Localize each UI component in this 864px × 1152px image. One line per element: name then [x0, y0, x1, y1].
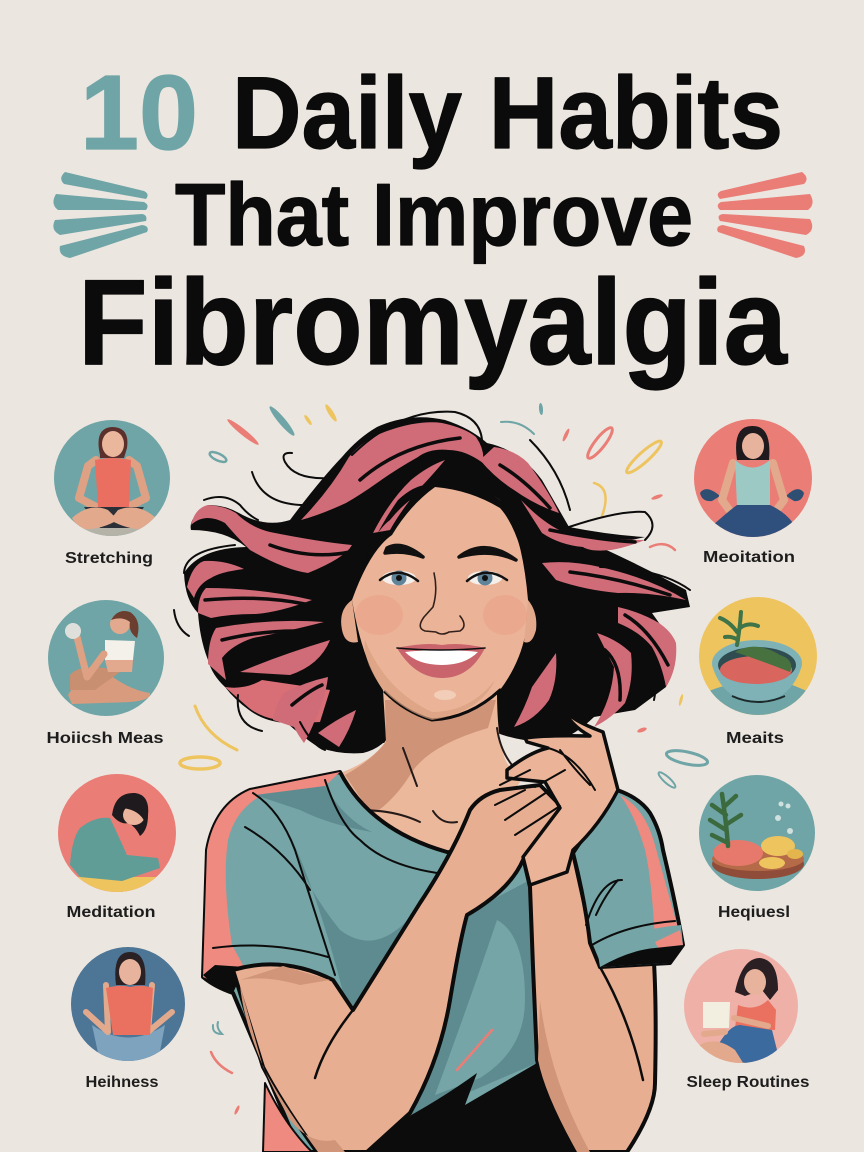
title: Daily Habits [232, 56, 783, 170]
finger lines [495, 748, 595, 835]
coral slash [457, 1030, 492, 1070]
eyebrows [385, 545, 516, 560]
icon: wellness [71, 947, 185, 1062]
icon: meditation left [58, 774, 178, 897]
shirt body [203, 772, 575, 1152]
face shade [365, 640, 495, 720]
confetti accents [180, 403, 709, 1115]
black cuff left [203, 965, 245, 993]
ears [341, 600, 536, 642]
label: Heqiuesl [718, 904, 790, 921]
nose [420, 573, 464, 634]
left arm [233, 785, 562, 1152]
icon: sleep routines [684, 949, 798, 1066]
hair back pink lower left [225, 680, 330, 722]
hair wisps [174, 412, 690, 750]
title [78, 54, 788, 390]
icon: coral rays right [717, 172, 813, 258]
sleeve left coral edge [203, 772, 340, 990]
label: Meaits [726, 730, 784, 747]
label: Meditation [66, 904, 156, 921]
label: Sleep Routines [686, 1074, 810, 1091]
shirt shading [255, 786, 537, 1125]
coral hem sliver [263, 1083, 312, 1152]
hair silhouette [184, 417, 690, 753]
right arm [523, 853, 656, 1152]
right arm crease [600, 967, 643, 1080]
title: Fibromyalgia [78, 254, 788, 390]
neck [340, 690, 520, 852]
cheeks [355, 595, 403, 635]
icon: stretching [54, 420, 170, 546]
right sleeve stripe [620, 795, 680, 943]
label: Stretching [65, 550, 153, 567]
hair pink strands [187, 422, 686, 747]
left arm crease [315, 1010, 353, 1078]
label: Heihness [86, 1074, 158, 1091]
icon: plate food [699, 775, 815, 891]
eyes [382, 571, 416, 585]
shirt lines [213, 780, 437, 975]
icon: bowl meal [699, 597, 817, 720]
panel: left habits [46, 420, 185, 1091]
right hand [507, 708, 618, 885]
icon: teal rays left [53, 172, 148, 258]
mouth [397, 644, 485, 678]
highlight [434, 690, 456, 700]
title: 10 [80, 54, 198, 172]
face [352, 487, 528, 720]
label: Meoitation [703, 549, 795, 566]
torso highlight [435, 920, 525, 1095]
right arm shade [538, 1000, 590, 1152]
icon: holistic meals [48, 600, 164, 716]
black shirt hem [367, 1063, 575, 1152]
hair black streaks [205, 438, 670, 705]
left arm shade [240, 985, 345, 1152]
fringe [356, 484, 530, 590]
jaw line [385, 690, 500, 720]
panel: right habits [684, 419, 817, 1091]
icon: meditation right [694, 419, 812, 540]
right sleeve cuff [597, 925, 683, 967]
label: Hoiicsh Meas [46, 730, 164, 747]
illustration: woman [174, 412, 690, 1152]
right sleeve [573, 790, 683, 967]
title: That Improve [175, 165, 693, 264]
neck shading [345, 700, 496, 815]
